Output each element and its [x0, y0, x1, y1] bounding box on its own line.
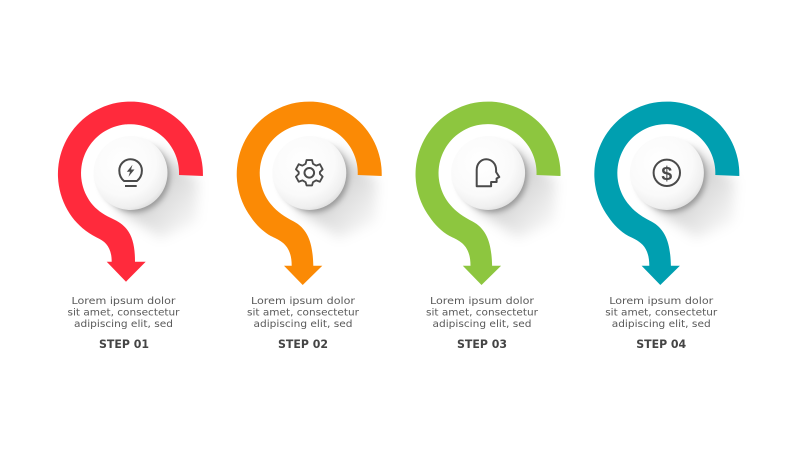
step label: STEP 04	[636, 338, 686, 351]
icon: head profile	[477, 159, 499, 186]
shadow	[100, 142, 198, 238]
shadow	[636, 142, 734, 238]
description: Lorem ipsum dolor	[430, 296, 535, 307]
description: Lorem ipsum dolor	[72, 296, 176, 307]
shadow	[278, 142, 377, 238]
description: adipiscing elit, sed	[74, 319, 173, 330]
ball	[94, 136, 168, 210]
description	[605, 296, 718, 330]
step 01	[58, 102, 203, 351]
description: adipiscing elit, sed	[612, 319, 711, 330]
ball	[451, 136, 525, 210]
step label: STEP 02	[278, 338, 328, 351]
description: adipiscing elit, sed	[433, 319, 532, 330]
icon: dollar coin	[654, 160, 680, 186]
description: Lorem ipsum dolor	[251, 296, 356, 307]
description: Lorem ipsum dolor	[609, 296, 714, 307]
description	[247, 296, 360, 330]
ball	[272, 136, 346, 210]
icon: dollar coin: $	[661, 163, 672, 185]
icon: light bulb	[119, 159, 142, 186]
description: sit amet, consectetur	[426, 308, 539, 318]
ball	[630, 136, 704, 210]
step label: STEP 01	[99, 338, 149, 351]
step 03	[416, 102, 561, 351]
icon: gear	[296, 160, 323, 185]
description: sit amet, consectetur	[605, 308, 718, 318]
shadow	[457, 142, 556, 238]
description	[426, 296, 539, 330]
step label: STEP 03	[457, 338, 507, 351]
step 02	[237, 102, 382, 351]
description: adipiscing elit, sed	[254, 319, 352, 330]
description	[68, 296, 180, 330]
arrow ribbon	[594, 102, 739, 285]
arrow ribbon	[58, 102, 203, 282]
arrow ribbon	[237, 102, 382, 285]
step 04	[594, 102, 739, 351]
arrow ribbon	[416, 102, 561, 285]
description: sit amet, consectetur	[68, 308, 180, 318]
description: sit amet, consectetur	[247, 308, 360, 318]
